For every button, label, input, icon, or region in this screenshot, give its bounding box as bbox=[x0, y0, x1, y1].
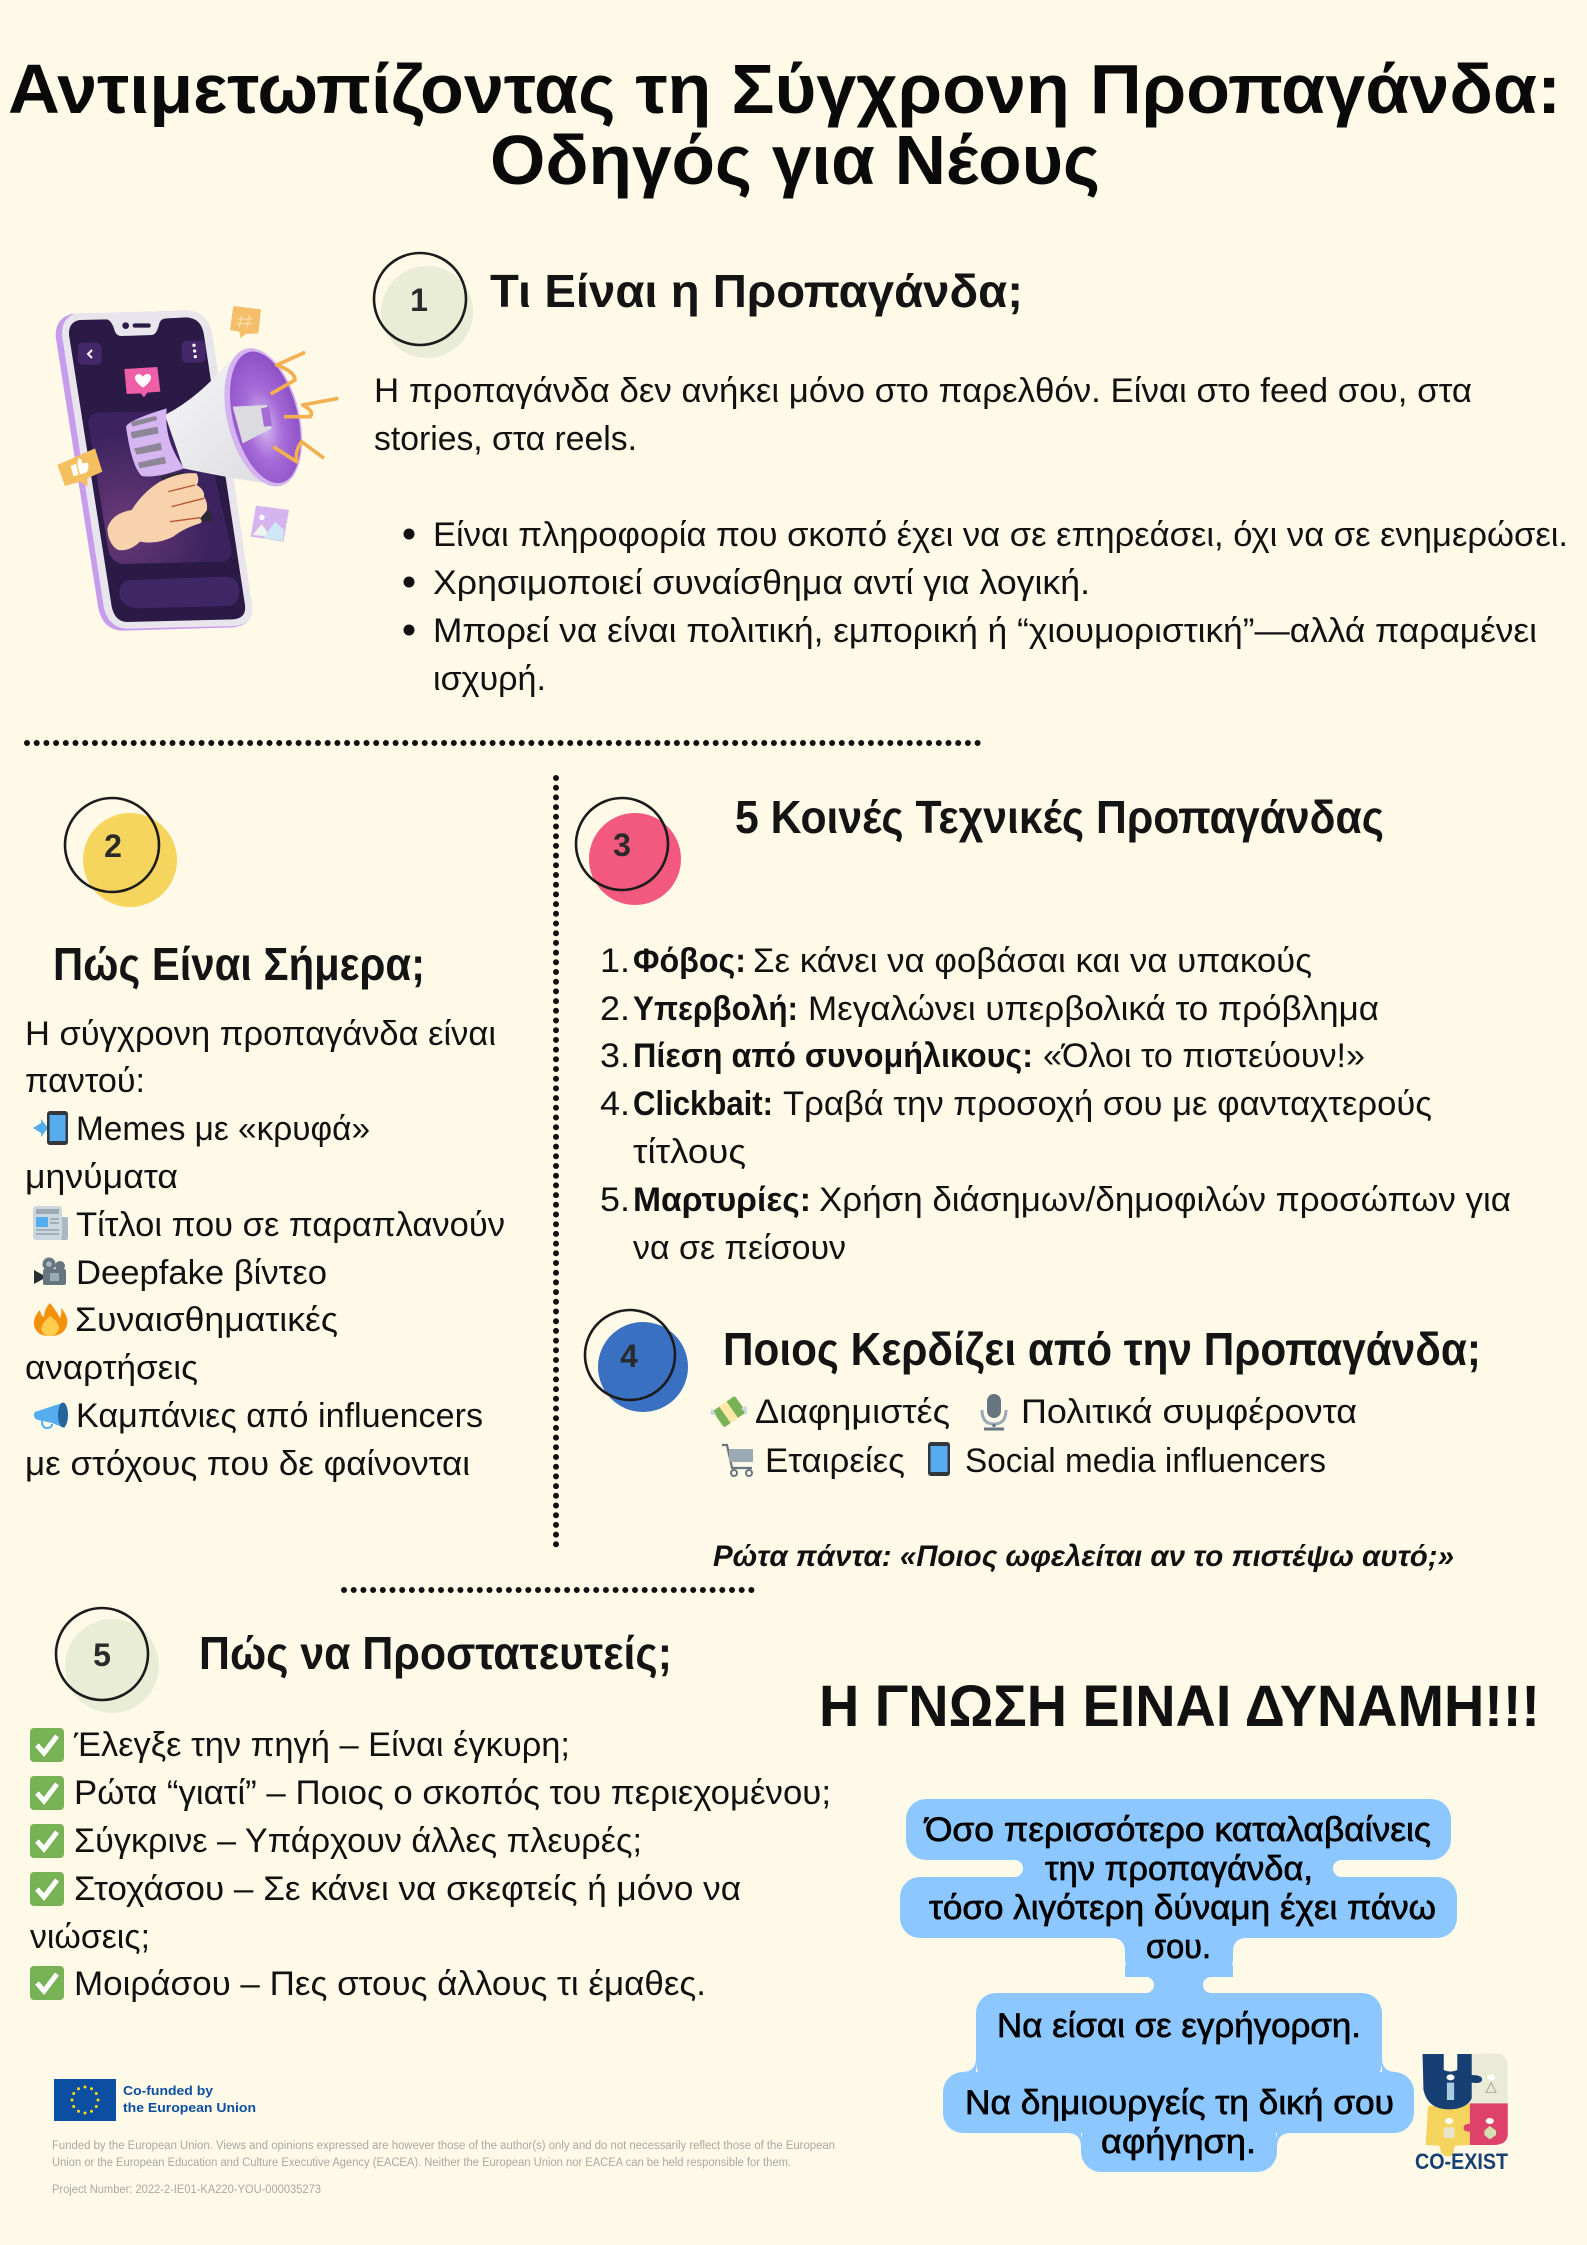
body text: αναρτήσεις bbox=[25, 1349, 198, 1387]
question quote: Ρώτα πάντα: «Ποιος ωφελείται αν το πιστέψω αυτό;» bbox=[713, 1540, 1454, 1573]
numbered list: Clickbait: bbox=[633, 1085, 773, 1123]
heading 1: Τι Είναι η Προπαγάνδα; bbox=[490, 265, 1023, 317]
body text: παντού: bbox=[25, 1062, 145, 1100]
title: Αντιμετωπίζοντας τη Σύγχρονη Προπαγάνδα: bbox=[8, 50, 1561, 128]
disclaimer bbox=[52, 2140, 835, 2196]
check item 5: Μοιράσου – Πες στους άλλους τι έμαθες. bbox=[74, 1965, 706, 2003]
callout: highlighted message: Να είσαι σε εγρήγορση. bbox=[997, 2007, 1361, 2045]
intro text: Η προπαγάνδα δεν ανήκει μόνο στο παρελθόν. Είναι στο feed σου, στα bbox=[374, 372, 1472, 410]
body text: Τίτλοι που σε παραπλανούν bbox=[76, 1206, 505, 1244]
numbered list: τίτλους bbox=[633, 1133, 746, 1171]
panel: how it looks today bbox=[25, 798, 505, 1483]
icon: fire bbox=[34, 1303, 67, 1336]
numbered list: 1. bbox=[600, 942, 630, 980]
numbered list: Πίεση από συνομήλικους: bbox=[633, 1037, 1033, 1075]
intro text bbox=[374, 372, 1472, 458]
numbered list: 3. bbox=[600, 1037, 630, 1075]
disclaimer: Union or the European Education and Culture Executive Agency (EACEA). Neither the European Union nor EACEA can be held responsible for them. bbox=[52, 2157, 791, 2169]
callout: highlighted message: Να δημιουργείς τη δική σου bbox=[965, 2084, 1394, 2122]
funding label: the European Union bbox=[123, 2100, 256, 2115]
numbered list: «Όλοι το πιστεύουν!» bbox=[1043, 1037, 1365, 1075]
icon: newspaper bbox=[33, 1206, 68, 1240]
numbered list: Μεγαλώνει υπερβολικά το πρόβλημα bbox=[808, 990, 1379, 1028]
bullet list: Χρησιμοποιεί συναίσθημα αντί για λογική. bbox=[433, 564, 1090, 602]
check item 4 bbox=[30, 1870, 741, 1956]
slogan: Η ΓΝΩΣΗ ΕΙΝΑΙ ΔΥΝΑΜΗ!!! bbox=[819, 1674, 1540, 1739]
label: companies: Εταιρείες bbox=[765, 1442, 905, 1480]
body text: με στόχους που δε φαίνονται bbox=[25, 1445, 470, 1483]
icon: EU flag bbox=[54, 2079, 116, 2121]
number badge 2 bbox=[65, 798, 177, 907]
check item 2: Ρώτα “γιατί” – Ποιος ο σκοπός του περιεχομένου; bbox=[74, 1774, 831, 1812]
title: Οδηγός για Νέους bbox=[490, 121, 1100, 199]
illustration: phone with megaphone bbox=[56, 306, 338, 631]
number badge 1: 1 bbox=[410, 282, 428, 318]
checklist bbox=[30, 1726, 831, 2003]
label: influencers: Social media influencers bbox=[965, 1442, 1326, 1480]
intro text: stories, στα reels. bbox=[374, 420, 637, 458]
icon: shopping cart bbox=[722, 1445, 753, 1476]
numbered list: 4. bbox=[600, 1085, 630, 1123]
body text: μηνύματα bbox=[25, 1158, 178, 1196]
number badge 1 bbox=[374, 253, 473, 358]
numbered list bbox=[600, 942, 1511, 1267]
number badge 4 bbox=[585, 1310, 688, 1412]
heading 4: Ποιος Κερδίζει από την Προπαγάνδα; bbox=[723, 1323, 1481, 1375]
number badge 3: 3 bbox=[613, 827, 631, 863]
callout: highlighted message: την προπαγάνδα, bbox=[1045, 1850, 1313, 1888]
body text: Καμπάνιες από influencers bbox=[76, 1397, 483, 1435]
funding label bbox=[123, 2083, 256, 2115]
icon: movie camera bbox=[34, 1258, 66, 1285]
icon: microphone bbox=[982, 1394, 1006, 1429]
logo: CO-EXIST bbox=[1415, 2053, 1508, 2174]
number badge 4: 4 bbox=[620, 1338, 638, 1374]
number badge 3 bbox=[576, 798, 681, 905]
body text: Deepfake βίντεο bbox=[76, 1254, 327, 1292]
funding label: Co-funded by bbox=[123, 2083, 214, 2098]
label: political interests: Πολιτικά συμφέροντα bbox=[1021, 1393, 1357, 1431]
panel: what is propaganda bbox=[374, 253, 1568, 698]
bullet list: Είναι πληροφορία που σκοπό έχει να σε επηρεάσει, όχι να σε ενημερώσει. bbox=[433, 516, 1568, 554]
number badge 5: 5 bbox=[93, 1637, 111, 1673]
label: advertisers: Διαφημιστές bbox=[755, 1393, 950, 1431]
icon: mobile phone bbox=[928, 1442, 950, 1476]
panel: who benefits bbox=[585, 1310, 1481, 1573]
body text: Η σύγχρονη προπαγάνδα είναι bbox=[25, 1015, 496, 1053]
icon: megaphone bbox=[34, 1402, 68, 1428]
numbered list: Υπερβολή: bbox=[633, 990, 798, 1028]
footer: EU funding bbox=[52, 2079, 835, 2196]
number badge 2: 2 bbox=[104, 828, 122, 864]
check item 1: Έλεγξε την πηγή – Είναι έγκυρη; bbox=[73, 1726, 570, 1764]
numbered list: να σε πείσουν bbox=[633, 1229, 846, 1267]
title bbox=[8, 50, 1561, 199]
heading 2: Πώς Είναι Σήμερα; bbox=[53, 938, 425, 990]
heading 5: Πώς να Προστατευτείς; bbox=[199, 1627, 672, 1679]
callout: highlighted message: τόσο λιγότερη δύναμη έχει πάνω bbox=[929, 1889, 1436, 1927]
numbered list: Σε κάνει να φοβάσαι και να υπακούς bbox=[753, 942, 1312, 980]
numbered list: Τραβά την προσοχή σου με φανταχτερούς bbox=[783, 1085, 1432, 1123]
callout: highlighted message bbox=[900, 1799, 1457, 2172]
body text: Συναισθηματικές bbox=[75, 1301, 338, 1339]
callout: highlighted message: Όσο περισσότερο καταλαβαίνεις bbox=[923, 1811, 1431, 1849]
callout: highlighted message: αφήγηση. bbox=[1101, 2123, 1256, 2161]
heading 3: 5 Κοινές Τεχνικές Προπαγάνδας bbox=[735, 791, 1384, 843]
numbered list: Μαρτυρίες: bbox=[633, 1181, 811, 1219]
callout: highlighted message: σου. bbox=[1146, 1928, 1211, 1966]
panel: five techniques bbox=[576, 791, 1511, 1267]
bullet list: Μπορεί να είναι πολιτική, εμπορική ή “χιουμοριστική”—αλλά παραμένει bbox=[433, 612, 1537, 650]
body text: Memes με «κρυφά» bbox=[76, 1110, 370, 1148]
numbered list: 5. bbox=[600, 1181, 630, 1219]
logo: CO-EXIST: CO-EXIST bbox=[1415, 2149, 1508, 2174]
numbered list: Χρήση διάσημων/δημοφιλών προσώπων για bbox=[819, 1181, 1511, 1219]
numbered list: Φόβος: bbox=[633, 942, 746, 980]
bullet list bbox=[404, 516, 1568, 698]
body text bbox=[25, 1015, 505, 1483]
bullet list: ισχυρή. bbox=[433, 660, 546, 698]
check item 3: Σύγκρινε – Υπάρχουν άλλες πλευρές; bbox=[74, 1822, 642, 1860]
check item 4: Στοχάσου – Σε κάνει να σκεφτείς ή μόνο να bbox=[74, 1870, 741, 1908]
icon: money with wings bbox=[708, 1391, 751, 1432]
icon: phone with arrow bbox=[33, 1111, 68, 1145]
numbered list: 2. bbox=[600, 990, 630, 1028]
disclaimer: Funded by the European Union. Views and opinions expressed are however those of the author(s) only and do not necessarily reflect those of the European bbox=[52, 2140, 835, 2152]
panel: how to protect yourself bbox=[30, 1608, 831, 2003]
check item 4: νιώσεις; bbox=[30, 1918, 150, 1956]
number badge 5 bbox=[56, 1608, 159, 1713]
disclaimer: Project Number: 2022-2-IE01-KA220-YOU-000035273 bbox=[52, 2184, 321, 2196]
